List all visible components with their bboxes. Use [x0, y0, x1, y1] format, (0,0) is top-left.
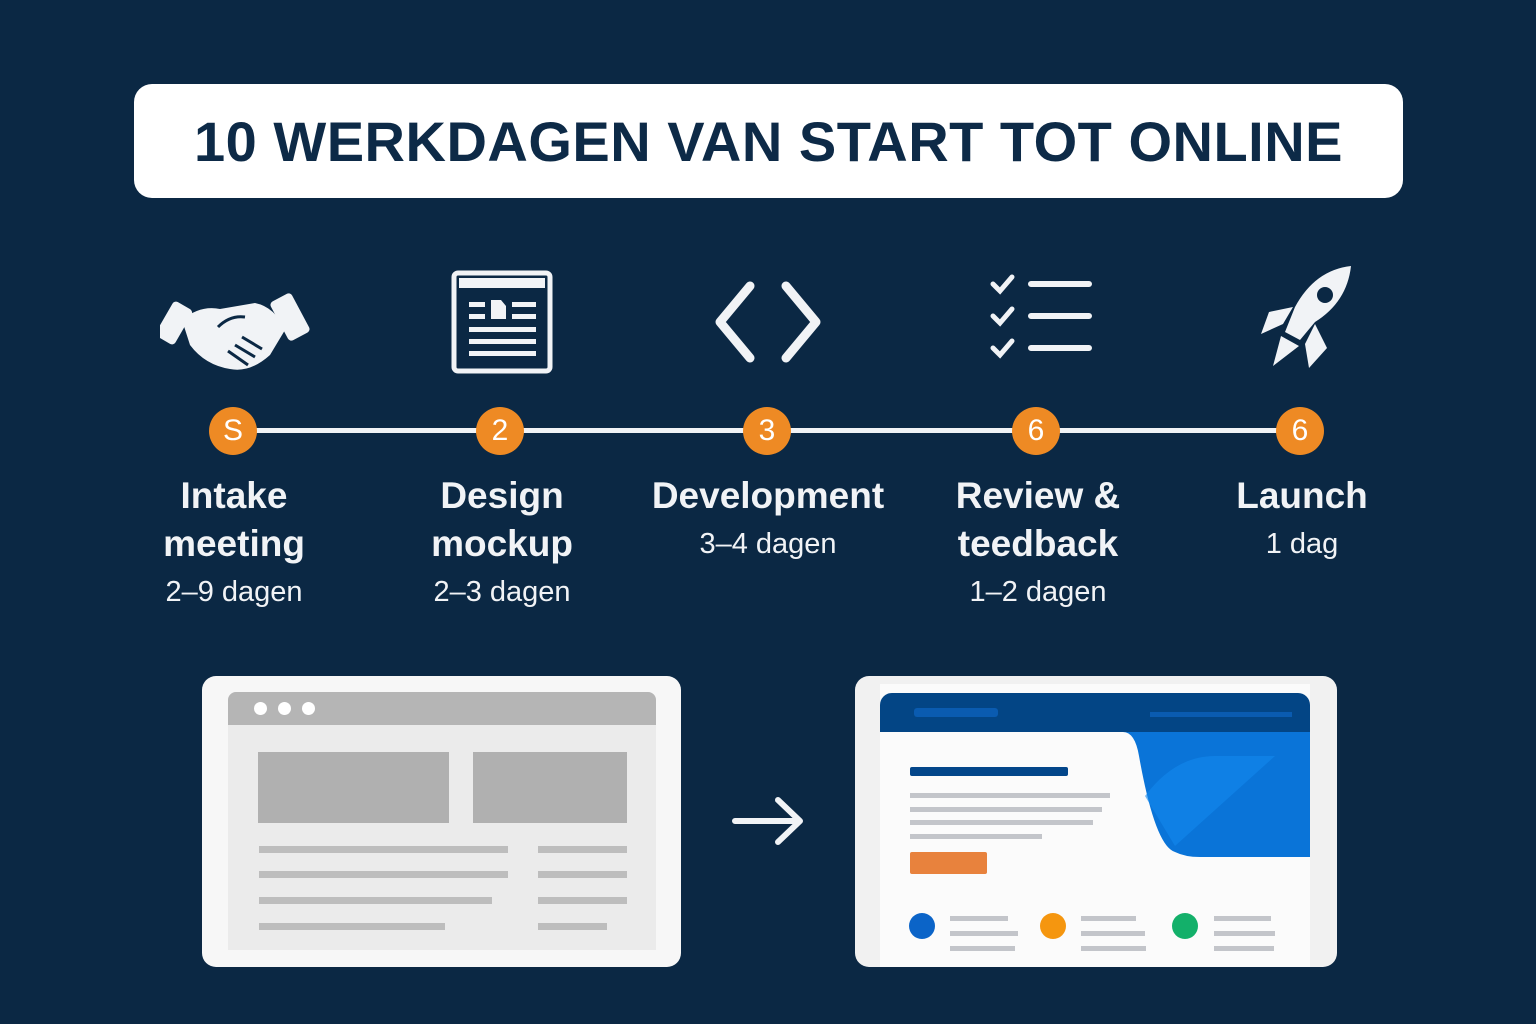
label: development: [652, 475, 884, 560]
label: intake: meeting: [163, 523, 305, 564]
icon: handshake: [160, 293, 310, 370]
label: design: [431, 475, 573, 608]
label: review: Review &: [956, 475, 1120, 516]
label: design: Design: [440, 475, 564, 516]
icon: checklist: [990, 274, 1092, 359]
step marker 1: [209, 407, 257, 455]
step marker 1: S: [223, 414, 243, 447]
step marker 5: 6: [1292, 414, 1308, 447]
label: review: 1–2 dagen: [969, 576, 1107, 608]
label: intake: Intake: [181, 475, 287, 516]
label: development: 3–4 dagen: [699, 528, 837, 560]
label: launch: Launch: [1236, 475, 1368, 516]
step marker 2: 2: [492, 414, 508, 447]
step marker 4: 6: [1028, 414, 1044, 447]
label: review: teedback: [958, 523, 1118, 564]
wireframe card: [202, 676, 681, 967]
icon: rocket: [1261, 266, 1351, 368]
step marker 5: [1276, 407, 1324, 455]
step marker 4: [1012, 407, 1060, 455]
label: design: 2–3 dagen: [433, 576, 571, 608]
icon: design mockup: [452, 270, 552, 374]
label: design: mockup: [431, 523, 573, 564]
step marker 3: [743, 407, 791, 455]
label: intake: 2–9 dagen: [165, 576, 303, 608]
final website card: [855, 676, 1337, 967]
title: 10 WERKDAGEN VAN START TOT ONLINE: [194, 110, 1343, 172]
label: development: Development: [652, 475, 884, 516]
label: launch: 1 dag: [1266, 528, 1338, 560]
label: review: [956, 475, 1120, 608]
step marker 2: [476, 407, 524, 455]
icon: code: [716, 282, 820, 362]
arrow: [732, 797, 803, 845]
label: launch: [1236, 475, 1368, 560]
title: [134, 84, 1403, 198]
label: intake: [163, 475, 305, 608]
timeline line: [233, 428, 1300, 433]
step marker 3: 3: [759, 414, 775, 447]
